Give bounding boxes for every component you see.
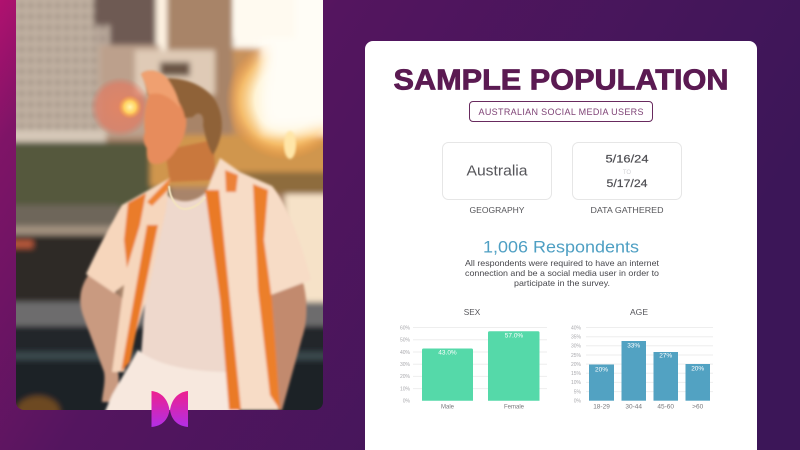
photo: man in striped shirt at sunset (16, 0, 323, 410)
white t-shirt (140, 190, 232, 372)
lens flare (92, 79, 146, 135)
subtitle pill: AUSTRALIAN SOCIAL MEDIA USERS (478, 107, 644, 117)
chart: age: 25% (571, 353, 582, 359)
card: data gathered (572, 142, 682, 215)
chart: age: 45-60 (657, 404, 674, 410)
card: data gathered: DATA GATHERED (590, 206, 664, 215)
chart: age: 30-44 (625, 404, 642, 410)
card: data gathered: 5/17/24 (606, 178, 648, 190)
chart: age: 35% (571, 334, 582, 340)
chart: age: >60 (692, 404, 704, 410)
chart: sex: 30% (400, 362, 411, 368)
trousers (104, 350, 240, 414)
chart: sex: 10% (400, 386, 411, 392)
title: SAMPLE POPULATION (394, 64, 728, 96)
card: geography (442, 142, 552, 215)
chart: age: 15% (571, 371, 582, 377)
arms (80, 270, 124, 402)
chart: age: 20% (571, 362, 582, 368)
left shirt panel with sleeve (86, 178, 170, 372)
chart: sex: Female (504, 404, 525, 410)
chart: age: 18-29 (593, 404, 610, 410)
bar: male: 43.0% (438, 350, 457, 356)
chart: age (571, 307, 713, 410)
bar: 18-29 (589, 364, 614, 401)
hair (145, 76, 223, 155)
chart: sex: Male (441, 404, 455, 410)
face (144, 92, 186, 164)
chart: age: 40% (571, 325, 582, 331)
sun glow (227, 46, 323, 156)
bar: male (422, 348, 473, 401)
bar: female (488, 331, 540, 401)
card: geography: GEOGRAPHY (470, 206, 525, 215)
chart: sex: 20% (400, 374, 411, 380)
chart: age: 0% (574, 398, 582, 404)
respondents count: 1,006 Respondents (483, 238, 639, 256)
bar: female: 57.0% (505, 332, 523, 340)
sex chart title: SEX (464, 307, 481, 317)
bar: 45-60: 27% (659, 352, 672, 360)
subtitle pill (470, 102, 652, 122)
chart: age: 5% (574, 389, 582, 395)
bar: over 60: 20% (691, 366, 704, 372)
bar: 18-29: 20% (595, 366, 608, 374)
chart: age: 30% (571, 344, 582, 350)
age chart title: AGE (630, 307, 648, 317)
chart: sex: 50% (400, 338, 411, 344)
logo (152, 391, 188, 427)
neck (165, 140, 216, 182)
card: data gathered: 5/16/24 (606, 154, 648, 166)
chart: sex: 60% (400, 325, 411, 331)
person (80, 71, 311, 414)
respondents description (465, 258, 660, 288)
chart: sex: 40% (400, 350, 411, 356)
bar: 30-44 (622, 341, 646, 401)
bar: over 60 (686, 364, 710, 401)
chart: sex: 0% (403, 398, 411, 404)
photo backdrop: city and river (16, 0, 323, 410)
right shirt panel with sleeve (206, 158, 311, 410)
chart: sex (400, 307, 547, 410)
respondents description: participate in the survey. (514, 278, 610, 288)
respondents description: connection and be a social media user in order to (465, 268, 659, 278)
card: geography: Australia (466, 162, 528, 180)
chart: age: 10% (571, 380, 582, 386)
bar: 30-44: 33% (627, 342, 640, 350)
respondents description: All respondents were required to have an internet (465, 258, 660, 268)
panel: sample population card (365, 41, 757, 450)
necklace (169, 186, 205, 209)
bar: 45-60 (654, 352, 678, 401)
card: data gathered: TO (623, 170, 631, 176)
